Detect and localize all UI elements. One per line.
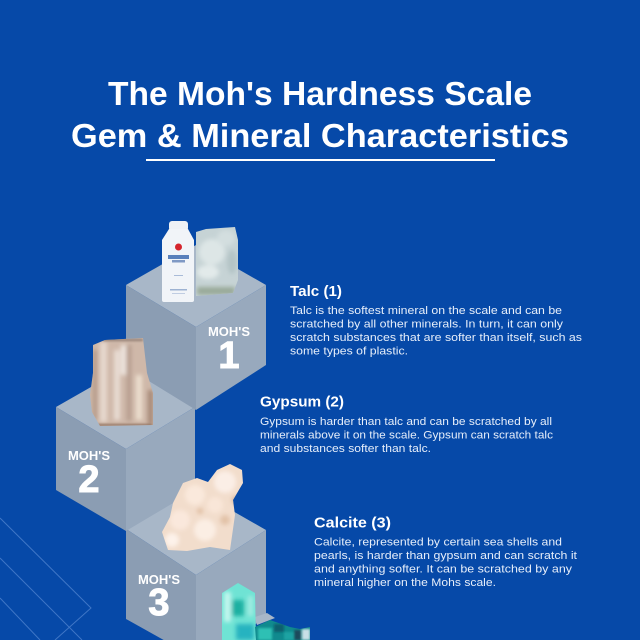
label: moh's 1: 1 xyxy=(218,335,240,377)
label: moh's 1 xyxy=(208,324,250,377)
label: moh's 1: MOH'S xyxy=(208,324,250,339)
label: moh's 3: MOH'S xyxy=(138,572,180,587)
teal crystal xyxy=(222,583,256,640)
text block: talc: scratch substances that are softer than itself, such as xyxy=(290,332,582,344)
text block: talc: Talc (1) xyxy=(290,284,342,300)
teal rock xyxy=(255,620,310,640)
text block: talc: some types of plastic. xyxy=(290,346,408,358)
text block: talc: Talc is the softest mineral on the scale and can be xyxy=(290,305,562,317)
text block: gypsum: Gypsum (2) xyxy=(260,394,344,410)
cube 4 top sliver xyxy=(255,613,275,625)
text block: gypsum: Gypsum is harder than talc and can be scratched by all xyxy=(260,416,552,428)
calcite rock xyxy=(162,464,243,551)
text block: talc xyxy=(290,284,582,358)
title: Gem & Mineral Characteristics xyxy=(71,117,569,154)
text block: gypsum xyxy=(260,394,553,455)
cube 2 xyxy=(56,367,195,531)
gypsum rock xyxy=(90,338,153,426)
label: moh's 2: MOH'S xyxy=(68,448,110,463)
text block: gypsum: minerals above it on the scale. Gypsum can scratch talc xyxy=(260,430,553,442)
text block: calcite: mineral higher on the Mohs scale. xyxy=(314,577,496,589)
label: moh's 3 xyxy=(138,572,180,624)
talc rock xyxy=(196,227,238,296)
text block: gypsum: and substances softer than talc. xyxy=(260,443,431,455)
label: moh's 2 xyxy=(68,448,110,501)
text block: calcite: Calcite, represented by certain sea shells and xyxy=(314,537,562,549)
talc powder bottle xyxy=(162,221,194,302)
text block: talc: scratched by all other minerals. In turn, it can only xyxy=(290,318,563,330)
text block: calcite xyxy=(314,515,578,589)
label: moh's 3: 3 xyxy=(148,582,170,624)
title xyxy=(71,75,569,154)
text block: calcite: and anything softer. It can be scratched by any xyxy=(314,564,572,576)
cube 1 xyxy=(126,245,266,410)
cube 3 xyxy=(126,490,266,640)
title: The Moh's Hardness Scale xyxy=(108,75,532,112)
title underline xyxy=(146,159,495,161)
label: moh's 2: 2 xyxy=(78,459,100,501)
decorative lines xyxy=(0,518,91,640)
text block: calcite: Calcite (3) xyxy=(314,515,391,531)
text block: calcite: pearls, is harder than gypsum and can scratch it xyxy=(314,550,578,562)
